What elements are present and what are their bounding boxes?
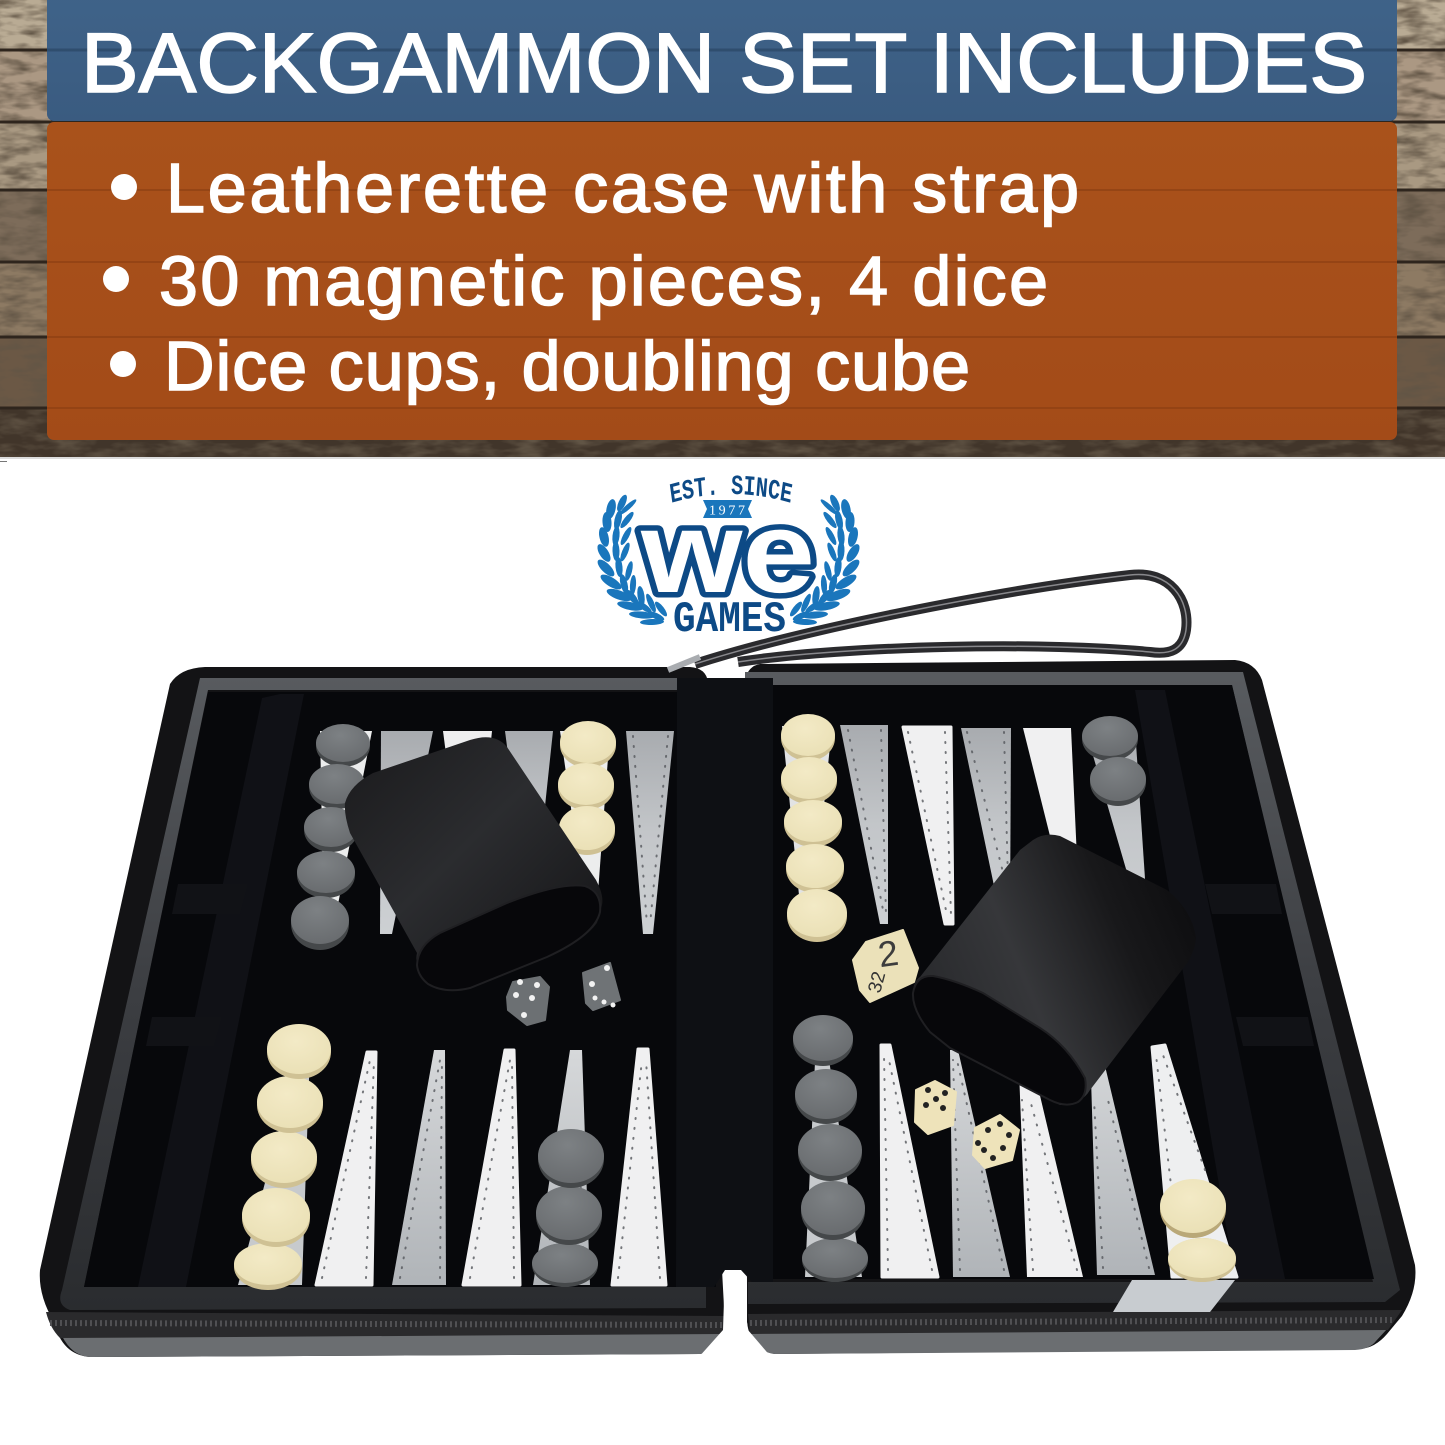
- panel: contents list: [47, 122, 1397, 440]
- dice cup right: [913, 835, 1196, 1105]
- board points bottom left: [238, 1049, 666, 1285]
- dice: doubling cube: 32: [865, 969, 890, 995]
- logo: est since: [670, 475, 792, 503]
- zipper pull: [668, 657, 700, 670]
- point stitching: [322, 730, 1205, 1278]
- logo: 1977 tag: 1977: [709, 504, 745, 518]
- case: centre hinge: [676, 678, 773, 1287]
- board points bottom right: [805, 1040, 1237, 1277]
- board points top right: [782, 725, 1148, 925]
- checkers: grey bottom left: [532, 1129, 604, 1287]
- case: right bottom grey edge: [750, 1328, 1388, 1354]
- checkers: grey top left: [291, 724, 370, 950]
- board points top left: [320, 731, 674, 935]
- checkers: grey bottom right: [793, 1015, 868, 1282]
- case: left zipper: [46, 1312, 724, 1338]
- case: right felt: [755, 685, 1374, 1279]
- dice: doubling cube: 2: [875, 932, 901, 975]
- case: left half shell: [40, 667, 725, 1357]
- case: notch: [698, 1270, 772, 1358]
- panel: title banner: [47, 0, 1397, 121]
- case: left rim: [60, 678, 706, 1310]
- checkers: ivory top right: [781, 714, 847, 942]
- checkers: ivory bottom left: [234, 1024, 331, 1290]
- case: silver repair strip: [1113, 1280, 1235, 1312]
- logo wreath right: [788, 493, 862, 625]
- checkers: ivory top left: [558, 721, 616, 855]
- case: right half shell: [745, 660, 1415, 1354]
- dice: grey: [507, 963, 620, 1025]
- case: right rim: [745, 672, 1400, 1304]
- heading: BACKGAMMON SET INCLUDES: [81, 16, 1367, 110]
- list item: case: Leatherette case with strap: [166, 149, 1079, 227]
- case: left felt: [84, 692, 716, 1287]
- checkers: ivory bottom right: [1160, 1179, 1236, 1282]
- logo: 1977 tag: [703, 500, 752, 518]
- dice: doubling cube: [853, 930, 918, 1002]
- case: right zipper: [748, 1310, 1402, 1334]
- strap: [695, 574, 1187, 664]
- case: left bottom grey edge: [62, 1332, 724, 1357]
- logo wreath left: [595, 493, 669, 625]
- checkers: grey top right: [1082, 716, 1146, 806]
- backgammon case: [40, 657, 1415, 1358]
- logo: WE Games: [598, 475, 860, 645]
- dice: ivory: [915, 1081, 1019, 1168]
- logo: est since: EST. SINCE: [670, 475, 792, 503]
- dice cup left: [345, 737, 602, 990]
- list item: pieces: 30 magnetic pieces, 4 dice: [159, 242, 1048, 320]
- background: wood planks: [0, 0, 1445, 462]
- logo: games: GAMES: [673, 595, 786, 645]
- list item: cups: Dice cups, doubling cube: [164, 327, 970, 405]
- logo: we wordmark: we: [640, 487, 815, 617]
